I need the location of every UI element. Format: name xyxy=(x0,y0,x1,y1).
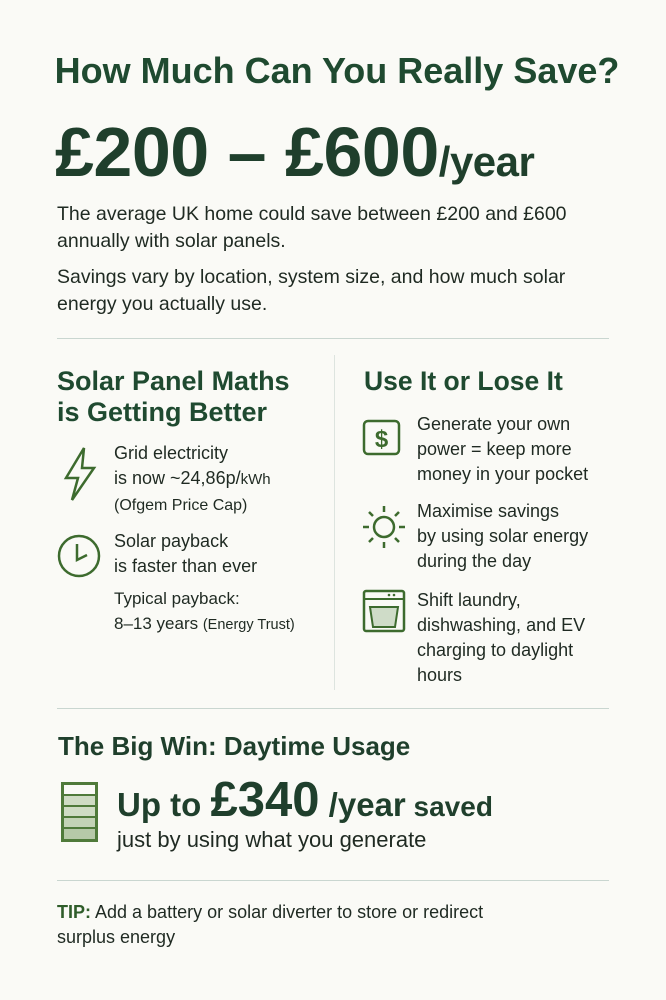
panel: use it or lose it xyxy=(362,366,588,685)
icon: dollar xyxy=(362,420,400,456)
intro paragraph: The average UK home could save between £200 and £600 annually with solar panels. xyxy=(57,203,567,252)
text: grid electricity: is now ~24,86p/kWh xyxy=(114,468,271,488)
icon: washer xyxy=(362,590,406,632)
text: shift: hours xyxy=(417,665,462,685)
icon: battery xyxy=(61,782,98,842)
text: shift: Shift laundry, xyxy=(417,590,521,610)
text: maximise: during the day xyxy=(417,551,531,571)
text: payback xyxy=(114,531,257,576)
text: generate: money in your pocket xyxy=(417,464,588,484)
icon: lightning xyxy=(64,447,96,501)
text: generate: power = keep more xyxy=(417,439,572,459)
big win subtext: just by using what you generate xyxy=(117,827,426,852)
text: maximise xyxy=(417,501,588,571)
text: grid electricity xyxy=(114,443,271,514)
panel: solar panel maths xyxy=(57,366,295,633)
icon: dollar: $ xyxy=(375,426,389,453)
heading: big win: The Big Win: Daytime Usage xyxy=(58,731,410,761)
text: typical payback: 8–13 years (Energy Trust) xyxy=(114,614,295,633)
text: generate xyxy=(417,414,588,484)
text: payback: is faster than ever xyxy=(114,556,257,576)
text: typical payback: Typical payback: xyxy=(114,589,240,608)
text: typical payback xyxy=(114,589,295,633)
big win figure: Up to £340 /year saved xyxy=(117,773,493,827)
text: shift: dishwashing, and EV xyxy=(417,615,585,635)
text: generate: Generate your own xyxy=(417,414,570,434)
title: How Much Can You Really Save? xyxy=(55,50,619,91)
text: maximise: Maximise savings xyxy=(417,501,559,521)
text: grid electricity: (Ofgem Price Cap) xyxy=(114,497,247,514)
text: payback: Solar payback xyxy=(114,531,228,551)
heading: is Getting Better xyxy=(57,397,267,427)
text: grid electricity: Grid electricity xyxy=(114,443,228,463)
icon: sun xyxy=(363,506,405,548)
icon: clock xyxy=(58,534,100,578)
text: shift: charging to daylight xyxy=(417,640,573,660)
text: shift xyxy=(417,590,585,685)
headline savings range: £200 – £600/year xyxy=(55,113,534,191)
tip: TIP: Add a battery or solar diverter to store or redirect surplus energy xyxy=(57,902,483,947)
note paragraph: Savings vary by location, system size, and how much solar energy you actually use. xyxy=(57,266,565,315)
heading: Solar Panel Maths xyxy=(57,366,290,396)
heading: Use It or Lose It xyxy=(364,366,563,396)
text: maximise: by using solar energy xyxy=(417,526,588,546)
heading xyxy=(57,366,290,427)
